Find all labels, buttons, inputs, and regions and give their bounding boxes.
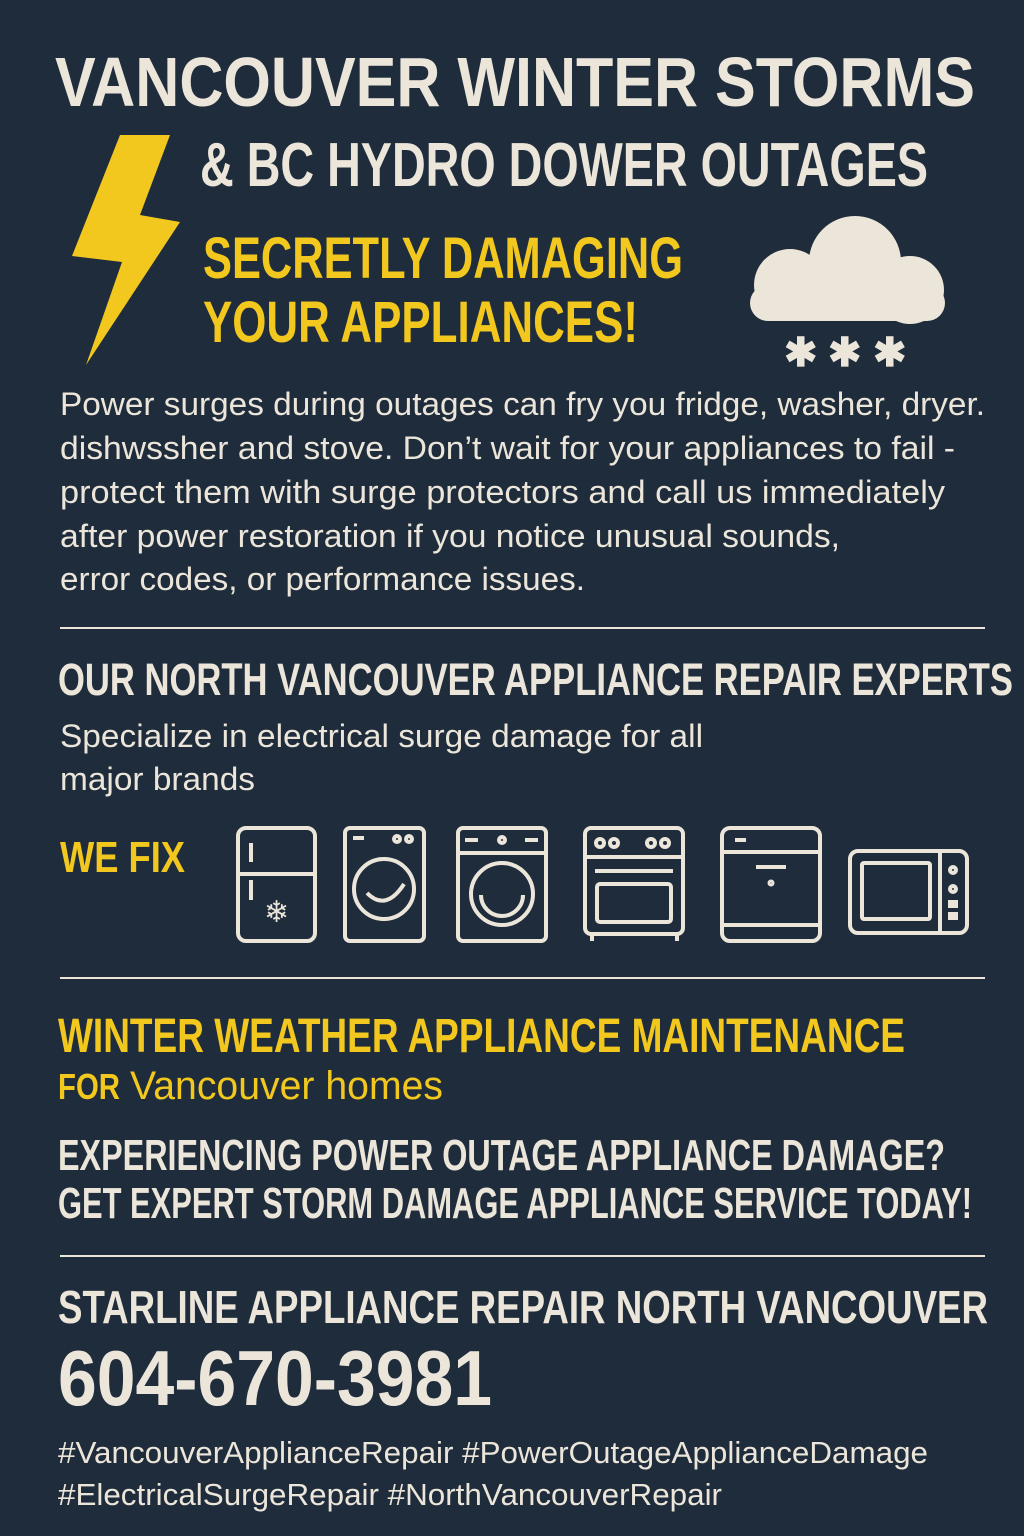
- subtitle yellow: [203, 226, 683, 355]
- icon: lightning bolt: [72, 135, 180, 365]
- icon: snow cloud: ✱: [784, 331, 818, 375]
- icon: snow cloud: ✱: [873, 331, 907, 375]
- hashtags: #VancouverApplianceRepair #PowerOutageApplianceDamage: [58, 1435, 928, 1470]
- experts text: [60, 718, 703, 797]
- subtitle yellow: SECRETLY DAMAGING: [203, 226, 683, 291]
- phone number: 604-670-3981: [58, 1334, 492, 1422]
- icon: dryer: [345, 828, 424, 941]
- icon: washer: [458, 828, 546, 941]
- icon: fridge: [238, 828, 315, 941]
- maintenance heading: [58, 1010, 905, 1108]
- intro paragraph: Power surges during outages can fry you fridge, washer, dryer.: [60, 386, 985, 422]
- experts text: major brands: [60, 761, 255, 797]
- call to action: [58, 1131, 972, 1228]
- hashtags: #ElectricalSurgeRepair #NorthVancouverRepair: [58, 1477, 722, 1512]
- intro paragraph: dishwssher and stove. Don’t wait for your appliances to fail -: [60, 430, 955, 466]
- maintenance heading: Vancouver homes: [130, 1064, 443, 1108]
- icon: microwave: [850, 851, 967, 933]
- icon: dishwasher: [722, 828, 820, 941]
- icon: stove: [585, 828, 683, 941]
- intro paragraph: protect them with surge protectors and call us immediately: [60, 474, 945, 510]
- icon: snow cloud: ✱: [828, 331, 862, 375]
- intro paragraph: error codes, or performance issues.: [60, 561, 585, 597]
- icon: snow cloud: [750, 216, 945, 375]
- experts text: Specialize in electrical surge damage for all: [60, 718, 703, 754]
- icon: fridge: ❄: [264, 896, 289, 929]
- maintenance heading: FOR: [58, 1066, 120, 1107]
- we fix label: WE FIX: [60, 833, 185, 882]
- intro paragraph: [60, 386, 985, 597]
- title: [55, 43, 975, 200]
- hashtags: [58, 1435, 928, 1512]
- subtitle yellow: YOUR APPLIANCES!: [203, 290, 638, 355]
- appliance icons: [238, 828, 967, 941]
- intro paragraph: after power restoration if you notice unusual sounds,: [60, 518, 840, 554]
